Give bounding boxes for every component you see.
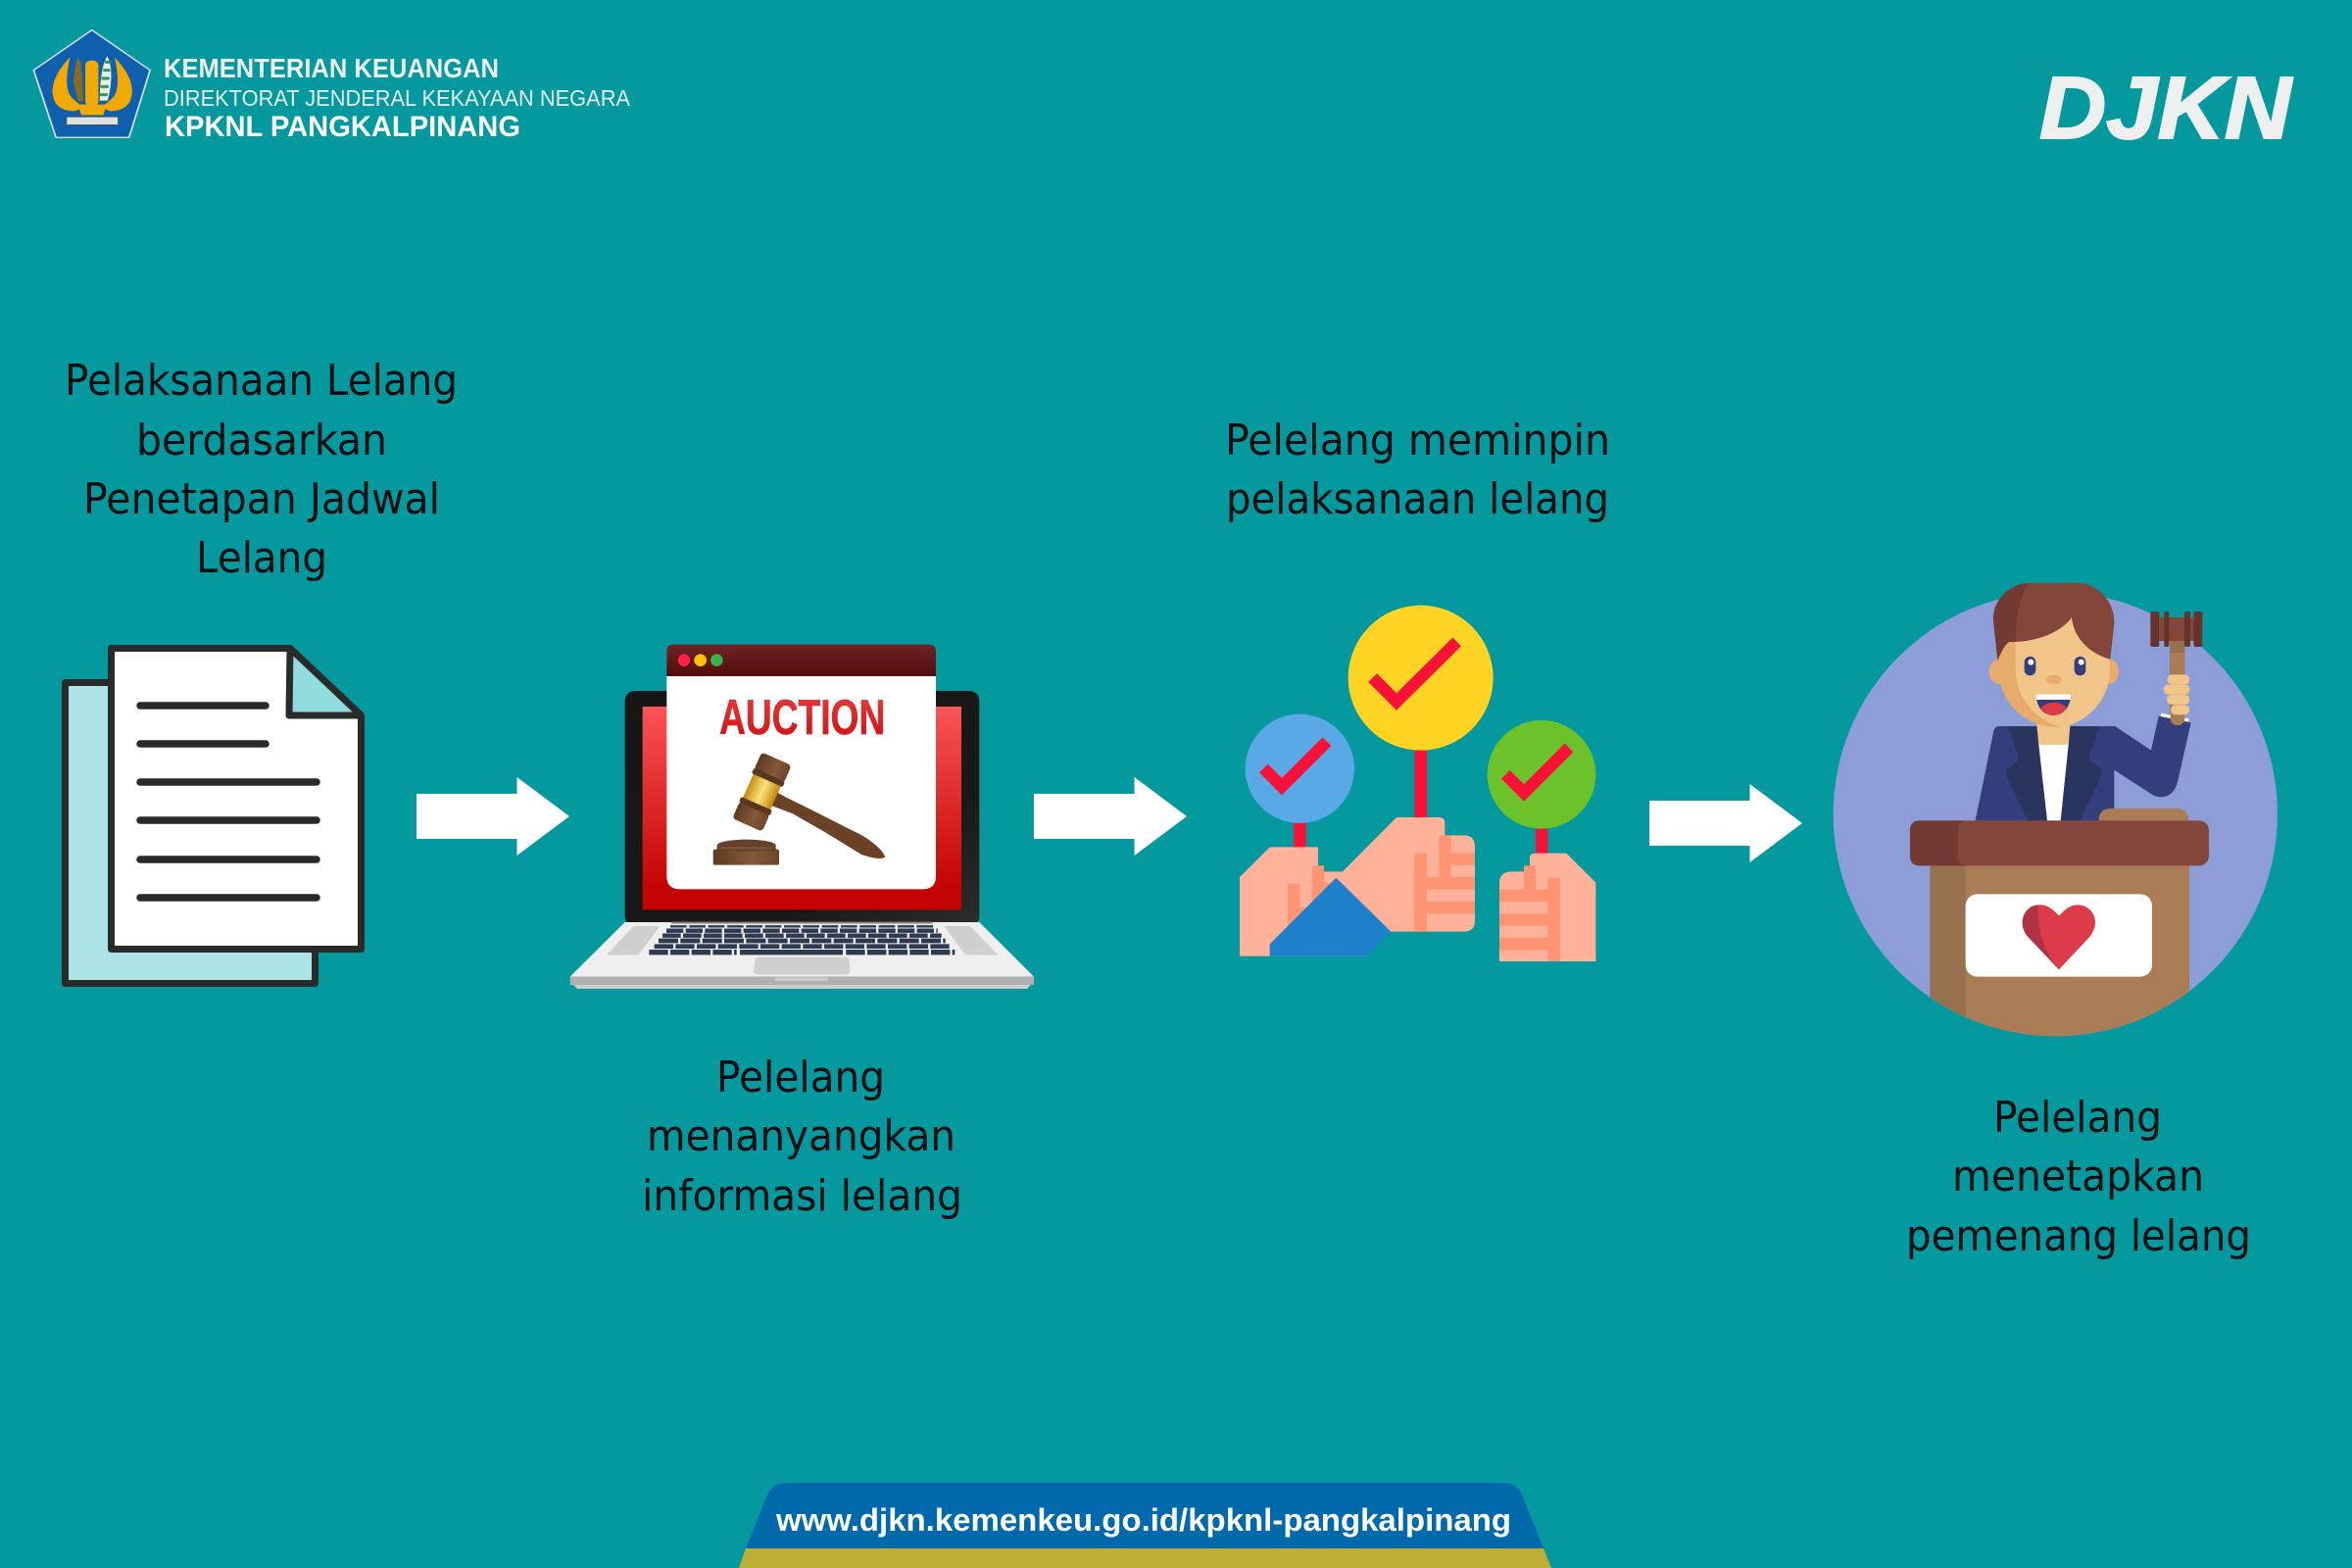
text block: step 1: Penetapan Jadwal [83, 474, 440, 524]
text block: step 3: Pelelang meminpin [1225, 416, 1610, 466]
logo: DJKN: DJKN [2039, 60, 2293, 158]
icon: hands holding voting paddles [1240, 606, 1595, 961]
header: ministry logo and names [33, 30, 631, 143]
browser window [666, 676, 936, 889]
neck [2036, 722, 2071, 745]
icon: gavel [713, 752, 885, 865]
text: DIREKTORAT JENDERAL KEKAYAAN NEGARA: DIREKTORAT JENDERAL KEKAYAAN NEGARA [164, 85, 631, 111]
ears [1989, 660, 2008, 684]
front sheet [112, 649, 361, 949]
text block: step 3: pelaksanaan lelang [1226, 474, 1609, 524]
folded corner [289, 649, 361, 715]
icon: ministry emblem [33, 30, 150, 137]
footer: website banner [739, 1483, 1551, 1568]
text block: step 2: Pelelang [716, 1053, 885, 1102]
blue tab [746, 1483, 1544, 1548]
back sheet [65, 682, 316, 984]
gavel in raised hand [2150, 612, 2202, 725]
text block: step 4: Pelelang [1993, 1093, 2162, 1143]
text block: step 1: Lelang [196, 533, 327, 583]
circle backdrop [1834, 592, 2278, 1036]
icon: documents [65, 649, 361, 984]
keyboard [649, 926, 955, 953]
eyes [2025, 657, 2035, 675]
text: KEMENTERIAN KEUANGAN: KEMENTERIAN KEUANGAN [164, 53, 499, 83]
icon: laptop with auction window [570, 645, 1034, 989]
podium sign [1966, 894, 2152, 977]
arrow 3 [1649, 784, 1802, 862]
touchpad [754, 957, 851, 974]
text block: step 4: menetapkan [1952, 1152, 2204, 1201]
podium [1910, 808, 2209, 1039]
text block: step 1: berdasarkan [136, 416, 387, 466]
window dots [678, 654, 690, 666]
yellow paddle [1348, 606, 1494, 751]
text block: step 4 [1906, 1093, 2251, 1261]
right hand [1499, 854, 1595, 961]
text block: step 2: menanyangkan [647, 1111, 956, 1161]
face [1999, 617, 2110, 727]
arrow 1 [416, 777, 569, 856]
arrow 2 [1034, 777, 1187, 856]
website url: www.djkn.kemenkeu.go.id/kpknl-pangkalpinang [775, 1502, 1511, 1538]
suit jacket [1976, 716, 2191, 820]
raised gavel handle end [2171, 706, 2184, 725]
nose [2046, 675, 2062, 684]
laptop deck [570, 922, 1034, 977]
heading: AUCTION: AUCTION [719, 689, 885, 745]
gold strip [739, 1548, 1551, 1568]
text block: step 3 [1225, 416, 1610, 524]
icon: auctioneer at podium [1834, 583, 2278, 1039]
lapels [2006, 726, 2047, 820]
text block: step 1: Pelaksanaan Lelang [65, 356, 458, 406]
paddle poles [1294, 745, 1547, 856]
left hands [1240, 817, 1475, 956]
shirt cuff [2161, 714, 2188, 720]
text lines [140, 706, 317, 898]
text block: step 2 [642, 1053, 962, 1221]
blue paddle [1246, 714, 1354, 823]
icon: heart [2023, 905, 2095, 969]
laptop screen [625, 691, 979, 926]
fist [2164, 674, 2189, 714]
shirt [2038, 742, 2069, 820]
text block: step 4: pemenang lelang [1906, 1211, 2251, 1261]
green paddle [1488, 720, 1595, 829]
mouth [2036, 694, 2071, 715]
text block: step 1 [65, 356, 458, 583]
hair [1993, 583, 2114, 660]
text: KPKNL PANGKALPINANG: KPKNL PANGKALPINANG [165, 111, 520, 143]
text block: step 2: informasi lelang [642, 1171, 962, 1221]
